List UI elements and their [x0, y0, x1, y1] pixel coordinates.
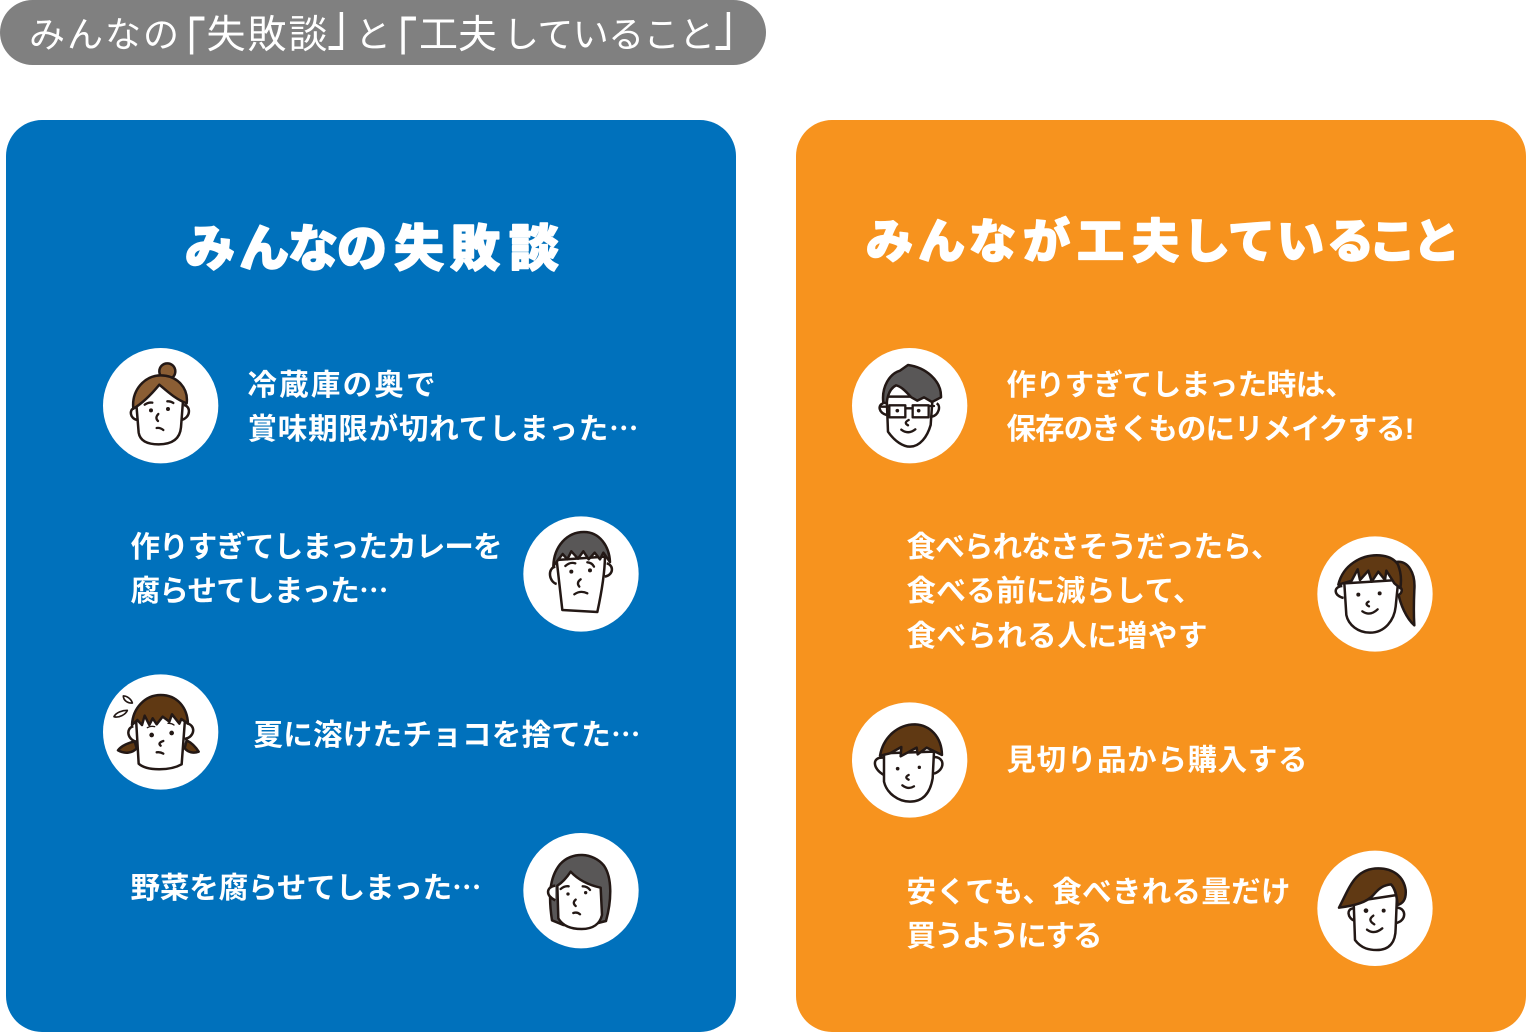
- avatar: man with dark hair: [523, 516, 639, 632]
- header pill: 失敗談: [206, 14, 328, 57]
- text: tip 2: [906, 531, 1280, 653]
- header pill: みんなの: [29, 14, 179, 55]
- text: tip 1: 作りすぎてしまった時は、: [1006, 369, 1354, 402]
- panel: failure stories: [6, 120, 736, 1032]
- text: tip 1: [1006, 369, 1414, 446]
- avatar: woman with ponytail: [1317, 536, 1433, 652]
- text: failure 2: 腐らせてしまった…: [130, 568, 388, 610]
- header pill: していること: [503, 14, 715, 55]
- text: tip 2: 食べられる人に増やす: [906, 620, 1208, 653]
- avatar: man with glasses: [852, 348, 967, 463]
- avatar: man with brown hair: [852, 702, 967, 818]
- header pill: [0, 0, 766, 79]
- avatar: woman with pigtails and sweat: [103, 674, 218, 790]
- panel: things people do: [796, 120, 1526, 1032]
- text: failure 1: 冷蔵庫の奥で: [248, 369, 436, 402]
- avatar: woman with bun: [103, 348, 218, 463]
- header pill: と: [355, 14, 391, 55]
- header pill: 「: [160, 14, 206, 79]
- text: tip 4: 買うようにする: [906, 920, 1102, 953]
- text: failure 1: [248, 369, 638, 448]
- text: failure 4: 野菜を腐らせてしまった…: [130, 865, 482, 907]
- heading: things people do: みんなが工夫していること: [866, 215, 1460, 268]
- text: tip 1: 保存のきくものにリメイクする!: [1006, 413, 1414, 446]
- header pill: 工夫: [419, 14, 497, 57]
- avatar: man with side-swept hair: [1317, 851, 1433, 966]
- text: tip 2: 食べる前に減らして、: [906, 575, 1202, 608]
- text: failure 2: [130, 531, 502, 610]
- text: tip 2: 食べられなさそうだったら、: [906, 531, 1280, 564]
- avatar: woman with dark bob: [523, 833, 639, 948]
- text: tip 4: 安くても、食べきれる量だけ: [906, 876, 1290, 909]
- text: tip 3: 見切り品から購入する: [1006, 744, 1308, 777]
- text: failure 1: 賞味期限が切れてしまった…: [248, 406, 638, 448]
- header pill: 「: [372, 14, 417, 79]
- heading: failure stories: みんなの失敗談: [185, 221, 559, 277]
- text: failure 2: 作りすぎてしまったカレーを: [130, 531, 502, 564]
- text: failure 3: 夏に溶けたチョコを捨てた…: [254, 712, 640, 754]
- text: tip 4: [906, 876, 1290, 953]
